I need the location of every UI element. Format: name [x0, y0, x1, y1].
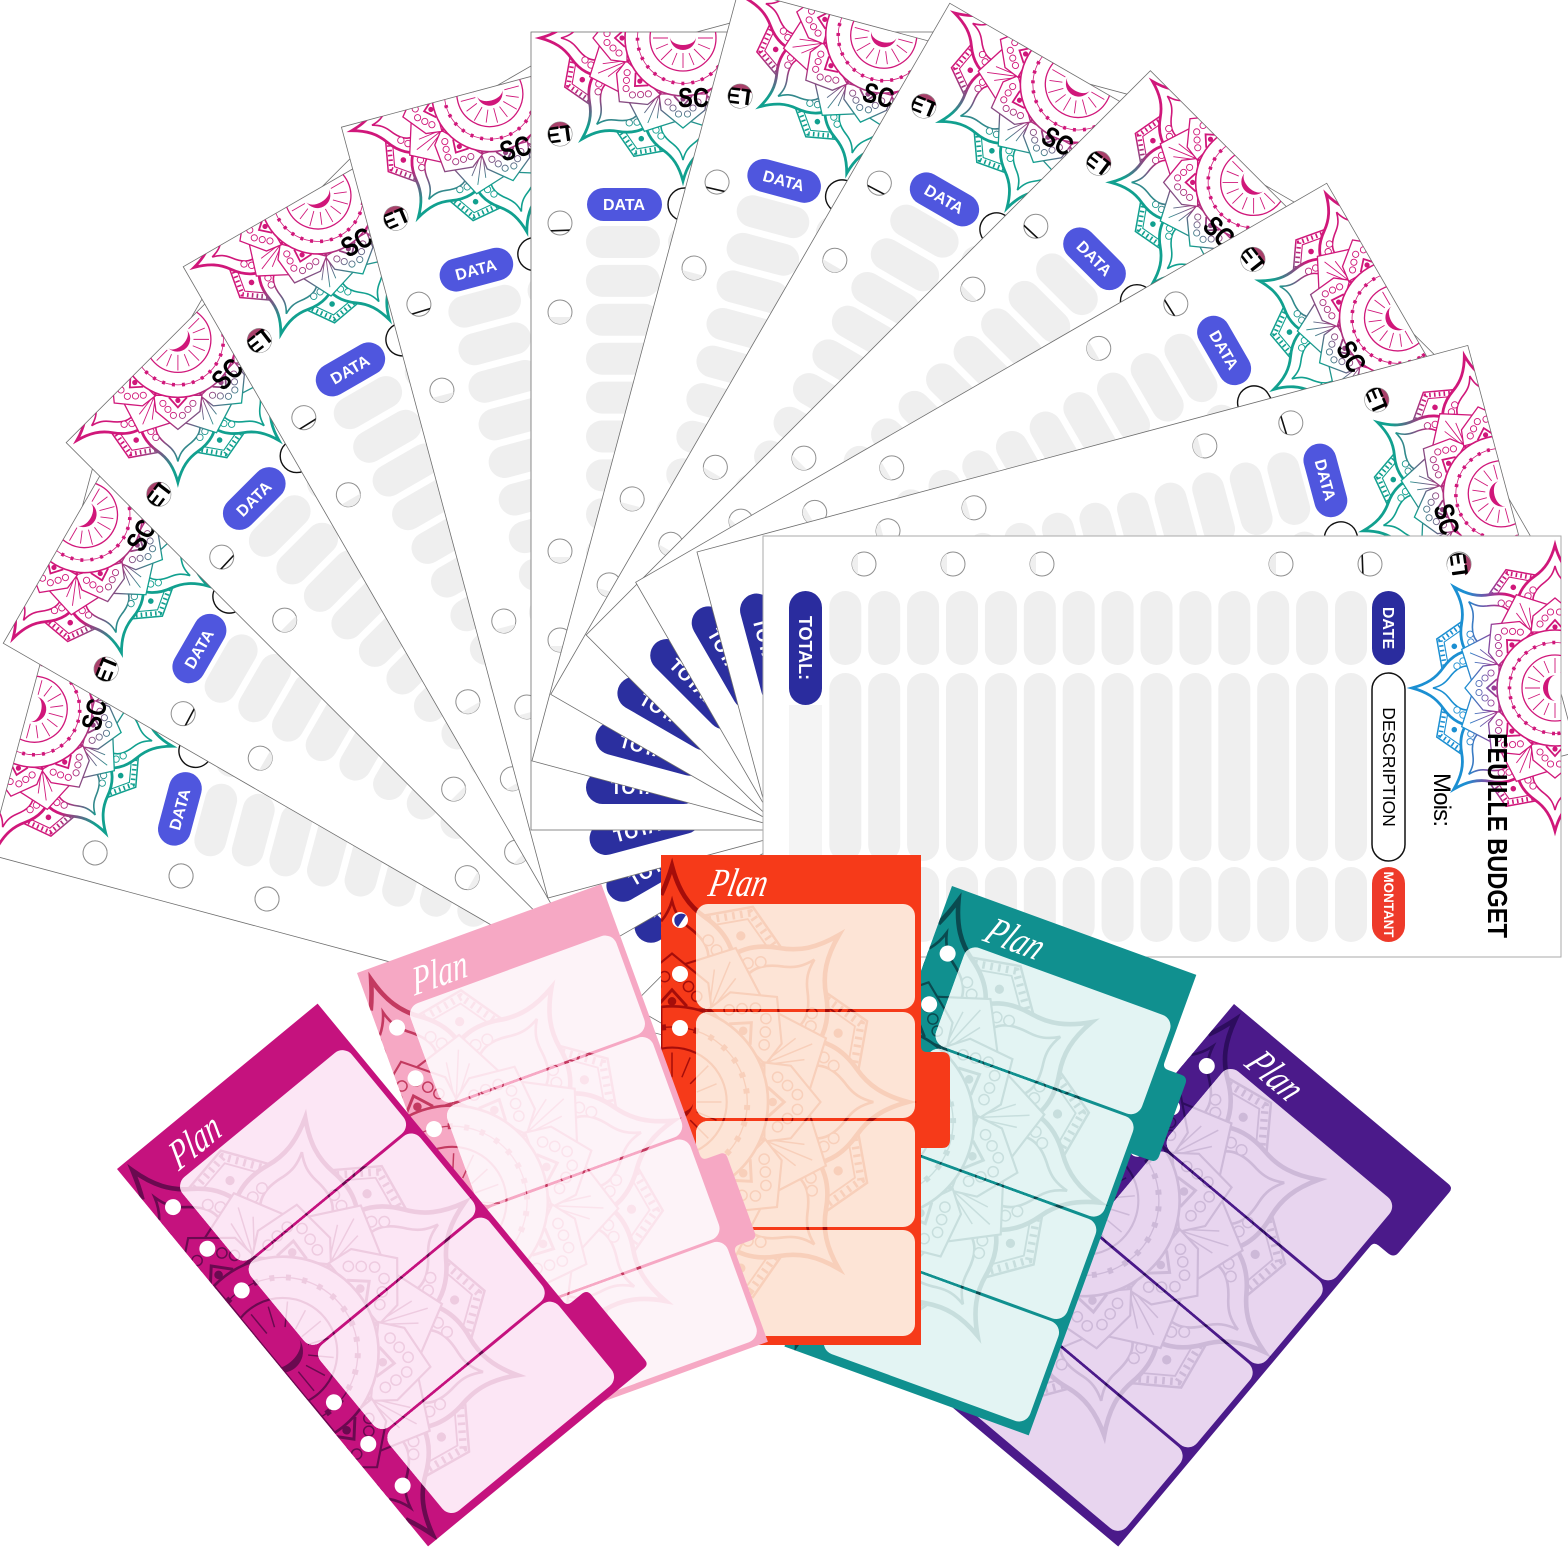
panel: budget sheet fan 3: SC: [205, 352, 249, 396]
panel: budget sheet fan 6 upright: DATA: [603, 197, 645, 214]
panel: budget sheet fan 10: ET: [1234, 240, 1272, 279]
title: Plan purple: Plan: [1235, 1042, 1316, 1108]
column header: DATE: DATE: [1379, 607, 1396, 650]
panel: budget sheet fan 9: TOTAL:: [665, 655, 725, 714]
panel: budget sheet fan 10: [635, 182, 1530, 803]
panel: budget sheet fan 6 upright: SC: [678, 82, 709, 113]
panel: budget sheet fan 3: [66, 158, 661, 996]
panel: budget sheet fan 3: ET: [140, 475, 178, 514]
panel: budget sheet fan 4: ET: [240, 321, 279, 360]
panel: budget sheet fan 1: DATA: [167, 787, 194, 832]
table rows: [829, 591, 1367, 942]
panel: teal Plan divider: [784, 886, 1196, 1436]
panel: budget sheet fan 2: TOTAL:: [689, 891, 739, 957]
panel: budget sheet fan 1: SC: [75, 696, 113, 733]
binder holes: [852, 552, 1472, 576]
panel: budget sheet fan 7: DATA: [761, 168, 806, 195]
heading: FEUILLE BUDGET: FEUILLE BUDGET: [1482, 733, 1513, 938]
panel: budget sheet fan 11: ET: [1359, 381, 1394, 418]
panel: budget sheet fan 10: TOTAL:: [703, 625, 753, 691]
panel: budget sheet fan 7: ET: [724, 81, 756, 111]
panel: budget sheet fan 2: SC: [120, 514, 162, 556]
panel: budget sheet fan 6 upright: ET: [544, 119, 576, 149]
panel: purple Plan divider: [952, 1004, 1451, 1546]
title: Plan magenta: Plan: [161, 1102, 228, 1180]
panel: budget sheet fan 7: [532, 0, 1145, 870]
panel: budget sheet fan 1: [0, 448, 869, 1061]
panel: budget sheet fan 8: TOTAL:: [636, 689, 702, 739]
icon: blue and magenta mandala: [1406, 540, 1561, 836]
panel: budget sheet fan 4: [182, 66, 762, 936]
panel: budget sheet fan 1: TOTAL:: [730, 908, 766, 976]
panel: budget sheet fan 4: TOTAL:: [625, 841, 691, 890]
panel: budget sheet fan 8: SC: [1037, 120, 1079, 162]
panel: budget sheet fan 11: DATA: [1311, 458, 1338, 503]
title: Plan red: Plan: [704, 860, 773, 905]
panel: pink Plan divider: [357, 884, 768, 1402]
column header: DESCRIPTION: [1372, 673, 1405, 861]
panel: budget sheet fan 8: [550, 2, 1294, 817]
panel: budget sheet fan 11: [696, 345, 1568, 798]
panel: magenta Plan divider: [117, 1004, 647, 1546]
panel: budget sheet fan 5: SC: [496, 129, 534, 167]
panel: budget sheet fan 4: SC: [336, 221, 378, 263]
panel: budget sheet fan 9: SC: [1197, 210, 1241, 254]
panel: budget sheet fan 5: DATA: [454, 257, 499, 284]
panel: budget sheet fan 2: DATA: [182, 627, 218, 672]
column header: DATE: [1372, 591, 1405, 665]
text: Mois: Mois:: [1428, 773, 1455, 827]
panel: budget sheet fan 10: DATA: [1205, 328, 1241, 373]
panel: budget sheet fan 2: ET: [89, 651, 124, 688]
title: Plan teal: Plan: [976, 909, 1055, 968]
panel: budget sheet fan 8: DATA: [921, 182, 966, 218]
column header: MONTANT: [1372, 867, 1405, 942]
panel: budget sheet fan 2: [2, 299, 661, 1024]
panel: budget sheet fan 7: TOTAL:: [617, 731, 685, 767]
total row: [789, 591, 822, 861]
panel: budget sheet fan 7: SC: [860, 76, 897, 114]
panel: budget sheet fan 10: SC: [1330, 336, 1372, 378]
panel: budget sheet fan 4: DATA: [328, 352, 373, 388]
panel: front budget sheet FEUILLE BUDGET: [763, 536, 1561, 957]
column header: DESCRIPTION: DESCRIPTION: [1379, 707, 1399, 827]
panel: budget sheet fan 8: ET: [905, 89, 942, 124]
panel: budget sheet fan 5: [341, 22, 762, 898]
panel: budget sheet fan 5: TOTAL:: [612, 810, 679, 846]
total row: TOTAL:: [795, 616, 815, 680]
panel: budget sheet fan 6 upright: [531, 32, 952, 830]
panel: budget sheet fan 9: DATA: [1073, 238, 1115, 280]
binder holes: ET: [1444, 549, 1474, 581]
panel: budget sheet fan 9: ET: [1079, 144, 1118, 183]
panel: budget sheet fan 6 upright: TOTAL:: [611, 778, 675, 798]
panel: budget sheet fan 11: TOTAL:: [749, 616, 785, 683]
title: Plan pink: Plan: [408, 940, 470, 1005]
panel: budget sheet fan 3: TOTAL:: [650, 868, 710, 928]
panel: red Plan divider: [632, 855, 950, 1345]
column header: MONTANT: MONTANT: [1381, 872, 1396, 938]
panel: budget sheet fan 5: ET: [377, 201, 414, 236]
panel: budget sheet fan 3: DATA: [234, 478, 276, 520]
panel: budget sheet fan 11: SC: [1428, 500, 1466, 538]
panel: budget sheet fan 9: [586, 70, 1434, 812]
